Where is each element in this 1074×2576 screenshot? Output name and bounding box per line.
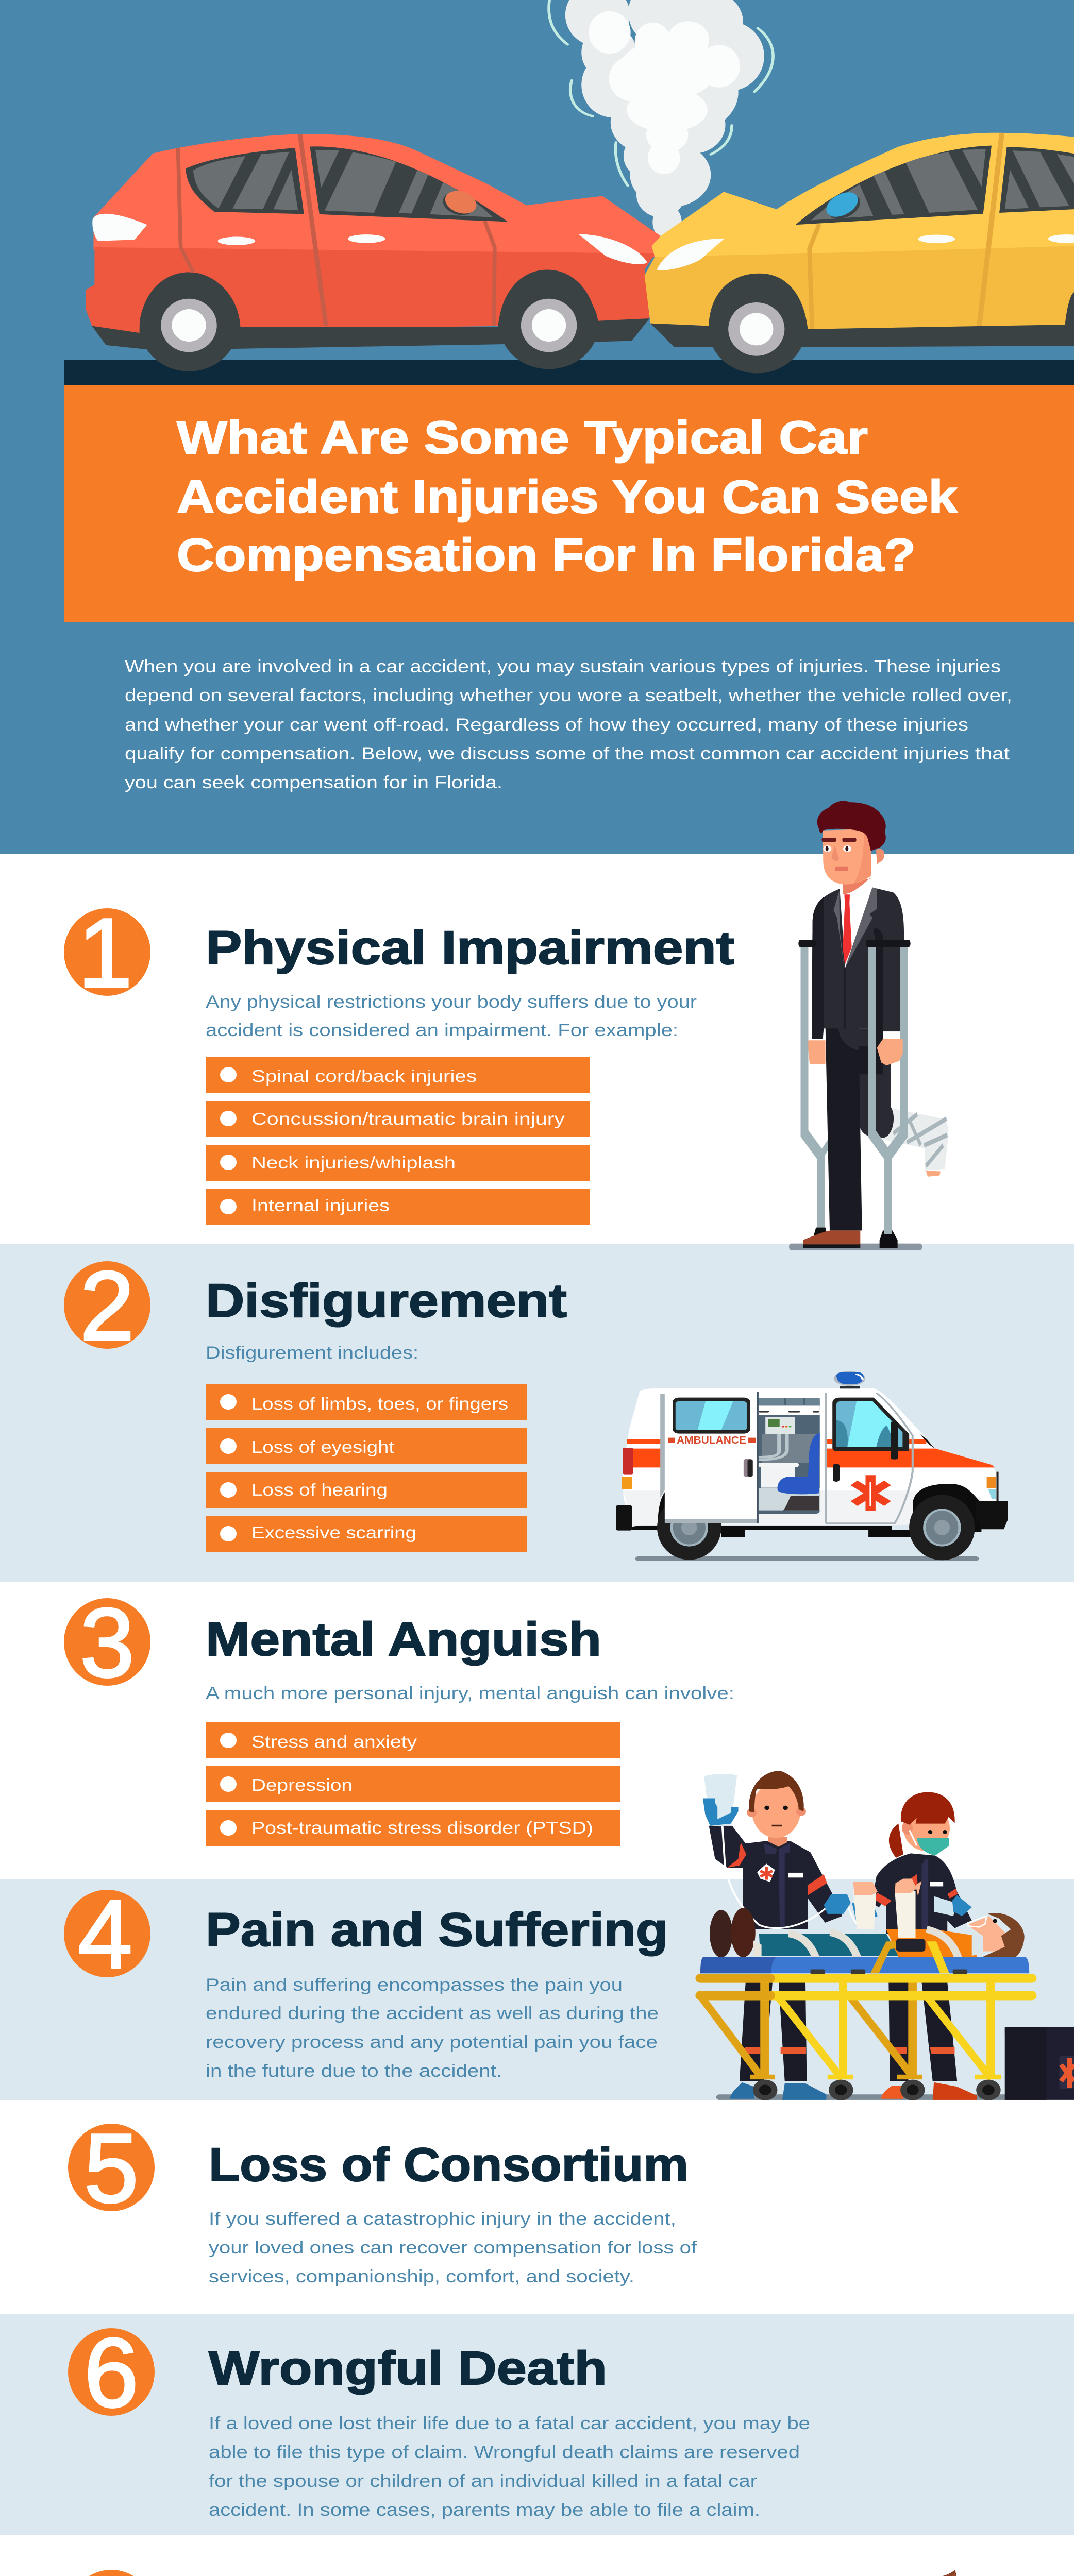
heading: Pain and Suffering [206,1904,668,1956]
number 6 badge: 6 [84,2318,139,2428]
list: Spinal cord/back injuries [251,1066,477,1086]
description [209,2414,810,2520]
description: If you suffered a catastrophic injury in the accident, [209,2209,676,2229]
number 1 badge [64,899,150,1008]
list: Loss of limbs, toes, or fingers [251,1394,508,1413]
number 3 badge [64,1588,150,1698]
list: Stress and anxiety [251,1732,417,1751]
illustration: man on crutches [789,801,948,1250]
number 5 badge: 5 [84,2114,139,2223]
description: recovery process and any potential pain you face [206,2032,658,2052]
illustration: red car [86,134,661,371]
illustration: yellow car [578,133,1074,374]
title [177,412,958,581]
description: Disfigurement includes: [206,1343,418,1363]
list: Internal injuries [251,1196,390,1215]
section 5: loss of consortium [68,2114,697,2286]
description: Pain and suffering encompasses the pain you [206,1975,623,1995]
list: Depression [251,1775,353,1794]
heading: Wrongful Death [209,2342,607,2395]
description: If a loved one lost their life due to a fatal car accident, you may be [209,2414,810,2433]
description [206,992,697,1040]
number 1 badge: 1 [78,899,132,1008]
list: Concussion/traumatic brain injury [251,1109,565,1128]
description: A much more personal injury, mental anguish can involve: [206,1684,734,1703]
header background [0,0,1074,854]
illustration: paramedics with stretcher [695,1771,1074,2100]
list [206,1384,527,1552]
description: endured during the accident as well as during the [206,2004,659,2023]
section backgrounds [0,854,1074,2576]
description: Any physical restrictions your body suffers due to your [206,992,697,1012]
description: accident is considered an impairment. For example: [206,1021,678,1040]
number 2 badge: 2 [80,1251,135,1361]
section 2: disfigurement [64,1251,567,1552]
title: Compensation For In Florida? [177,530,916,581]
list [206,1722,620,1846]
description [206,1975,659,2081]
number 6 badge [68,2318,155,2428]
title banner [64,385,1074,622]
ambulance label: AMBULANCE [677,1435,746,1446]
description: in the future due to the accident. [206,2061,502,2081]
section 7: our team can help [68,2560,812,2576]
intro paragraph [125,657,1012,792]
section 1: physical impairment [64,899,734,1225]
list: Loss of eyesight [251,1437,394,1456]
number 2 badge [64,1251,150,1361]
list: Post-traumatic stress disorder (PTSD) [251,1818,593,1837]
description: your loved ones can recover compensation for loss of [209,2238,697,2258]
section 4: pain and suffering [64,1880,668,2081]
number 5 badge [68,2114,155,2223]
heading: Loss of Consortium [209,2139,689,2191]
intro paragraph: you can seek compensation for in Florida. [125,773,502,792]
title: Accident Injuries You Can Seek [177,471,958,523]
intro paragraph: depend on several factors, including whether you wore a seatbelt, whether the vehicle rolled over, [125,686,1012,705]
illustration: ambulance [616,1371,1008,1561]
list [206,1057,590,1225]
number 7 badge [68,2560,155,2576]
description: for the spouse or children of an individual killed in a fatal car [209,2471,757,2491]
heading: Disfigurement [206,1275,567,1327]
number 4 badge: 4 [78,1880,132,1989]
heading: Physical Impairment [206,922,734,974]
number 3 badge: 3 [80,1588,135,1698]
illustration: lawyer with briefcase [819,2570,1029,2576]
illustration: smoke cloud [549,0,773,240]
description: able to file this type of claim. Wrongful death claims are reserved [209,2443,800,2462]
description: services, companionship, comfort, and society. [209,2267,634,2286]
number 4 badge [64,1880,150,1989]
intro paragraph: When you are involved in a car accident, you may sustain various types of injuries. These injuries [125,657,1001,676]
road [64,360,1074,385]
description [209,2209,697,2286]
section 6: wrongful death [68,2318,810,2520]
intro paragraph: and whether your car went off-road. Regardless of how they occurred, many of these injuries [125,715,968,735]
description: accident. In some cases, parents may be able to file a claim. [209,2500,760,2520]
intro paragraph: qualify for compensation. Below, we discuss some of the most common car accident injuries that [125,744,1010,764]
list: Excessive scarring [251,1523,416,1542]
list: Loss of hearing [251,1480,388,1499]
list: Neck injuries/whiplash [251,1153,456,1172]
title: What Are Some Typical Car [177,412,868,464]
section 3: mental anguish [64,1588,734,1846]
heading: Mental Anguish [206,1613,601,1666]
